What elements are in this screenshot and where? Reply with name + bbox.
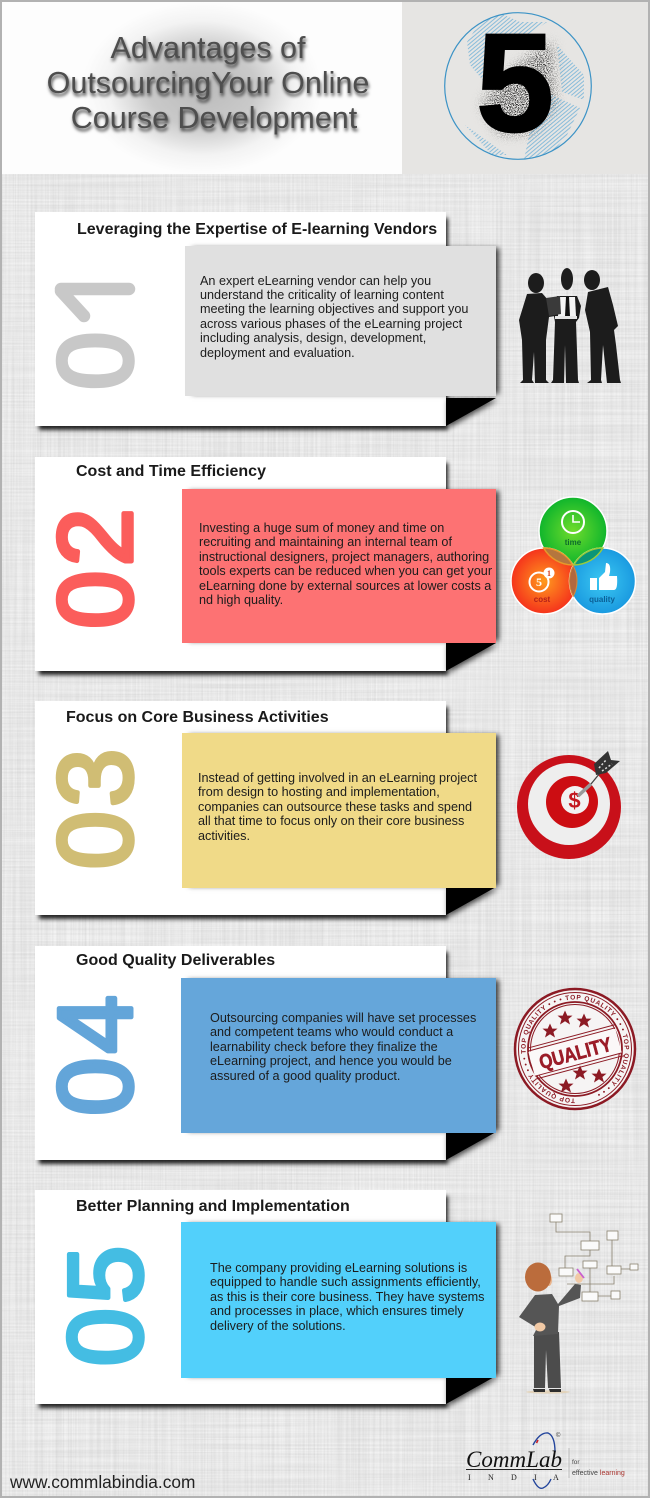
description text: recruiting and maintaining an internal team of bbox=[199, 535, 452, 549]
icon: time cost quality venn bbox=[510, 496, 636, 615]
website url: www.commlabindia.com bbox=[10, 1472, 195, 1492]
title bbox=[46, 31, 372, 140]
heading: Good Quality Deliverables bbox=[76, 952, 275, 969]
description text: tools experts can be reduced when you can get your bbox=[199, 564, 492, 578]
panel: advantage 04 bbox=[35, 946, 636, 1168]
logo: CommLab India: N bbox=[488, 1473, 494, 1482]
logo: CommLab India: © bbox=[556, 1432, 561, 1439]
fold corner bbox=[444, 396, 499, 430]
right grey block with number 5 bbox=[402, 2, 648, 174]
description text: understand the criticality of learning content bbox=[200, 288, 444, 302]
description text: eLearning done by external sources at lower costs a bbox=[199, 579, 491, 593]
heading: Cost and Time Efficiency bbox=[76, 463, 266, 480]
description text: across various phases of the eLearning project bbox=[200, 317, 462, 331]
description text bbox=[210, 1261, 484, 1333]
panel: advantage 01 bbox=[35, 212, 621, 434]
icon: time cost quality venn: cost bbox=[534, 595, 551, 604]
title glow bbox=[82, 2, 322, 174]
description text: Investing a huge sum of money and time on bbox=[199, 521, 444, 535]
icon: time cost quality venn: 1 bbox=[547, 569, 551, 578]
description text bbox=[199, 521, 492, 607]
logo: CommLab India: D bbox=[511, 1473, 517, 1482]
fold corner bbox=[444, 642, 499, 676]
number 01 bbox=[50, 282, 140, 390]
panel: advantage 03 bbox=[35, 701, 621, 922]
description text: as this is their core business. They have systems bbox=[210, 1290, 484, 1304]
description text bbox=[200, 274, 468, 360]
icon: time cost quality venn: 5 bbox=[536, 575, 542, 589]
description text: meeting the learning objectives and support you bbox=[200, 302, 468, 316]
logo: CommLab India: effective learning bbox=[572, 1470, 625, 1477]
description text: instructional designers, project managers, authoring bbox=[199, 550, 489, 564]
logo: CommLab India: CommLab bbox=[466, 1447, 562, 1472]
description panel bbox=[181, 1222, 496, 1378]
description text: learnability check before they finalize the bbox=[210, 1040, 438, 1054]
icon: business people silhouettes bbox=[519, 268, 621, 383]
icon: target with dart bbox=[517, 751, 621, 859]
description panel bbox=[182, 733, 496, 888]
description text: and processes in place, which ensures timely bbox=[210, 1304, 464, 1318]
logo: CommLab India: for bbox=[572, 1459, 580, 1466]
title: OutsourcingYour Online bbox=[47, 66, 369, 100]
description panel bbox=[185, 246, 496, 396]
panel: advantage 05 bbox=[35, 1190, 638, 1412]
description text: equipped to handle such assignments efficiently, bbox=[210, 1275, 481, 1289]
description text: all that time to focus only on their core business bbox=[198, 814, 464, 828]
card background bbox=[35, 212, 446, 426]
card background bbox=[35, 457, 446, 671]
logo: CommLab India bbox=[466, 1432, 625, 1489]
description text: deployment and evaluation. bbox=[200, 346, 355, 360]
fold corner bbox=[444, 886, 499, 920]
description text: activities. bbox=[198, 829, 250, 843]
description text: from design to hosting and implementation, bbox=[198, 785, 440, 799]
icon: time cost quality venn: quality bbox=[589, 595, 615, 604]
description text: Instead of getting involved in an eLearning project bbox=[198, 771, 477, 785]
description text: delivery of the solutions. bbox=[210, 1319, 346, 1333]
fold corner bbox=[444, 1131, 499, 1164]
description panel bbox=[182, 489, 496, 643]
description text: nd high quality. bbox=[199, 593, 283, 607]
heading: Better Planning and Implementation bbox=[76, 1198, 350, 1215]
description text: The company providing eLearning solutions is bbox=[210, 1261, 467, 1275]
title: Advantages of bbox=[110, 31, 306, 65]
logo: CommLab India: I bbox=[534, 1473, 537, 1482]
panel: advantage 02 bbox=[35, 457, 636, 678]
heading: Focus on Core Business Activities bbox=[66, 709, 329, 726]
logo: CommLab India: A bbox=[553, 1473, 559, 1482]
card background bbox=[35, 701, 446, 915]
heading: Leveraging the Expertise of E-learning Vendors bbox=[77, 221, 437, 238]
description text: including analysis, design, development, bbox=[200, 331, 426, 345]
icon: globe with big 5 bbox=[444, 11, 592, 161]
icon: time cost quality venn: time bbox=[565, 538, 582, 547]
title: Course Development bbox=[71, 101, 357, 135]
description text: An expert eLearning vendor can help you bbox=[200, 274, 431, 288]
description text bbox=[198, 771, 477, 843]
description text: Outsourcing companies will have set processes bbox=[210, 1011, 476, 1025]
description text: and competent teams who would conduct a bbox=[210, 1025, 453, 1039]
header banner bbox=[2, 2, 648, 174]
icon: quality stamp: QUALITY bbox=[537, 1034, 615, 1074]
description panel bbox=[181, 978, 496, 1133]
description text: eLearning project, and hence you would be bbox=[210, 1054, 452, 1068]
icon: quality stamp: TOP QUALITY • • • TOP QUALITY • • • TOP QUALITY • • • TOP QUALITY • • • bbox=[521, 994, 630, 1104]
description text: companies can outsource these tasks and spend bbox=[198, 800, 472, 814]
description text: assured of a good quality product. bbox=[210, 1069, 400, 1083]
card background bbox=[35, 1190, 446, 1404]
card background bbox=[35, 946, 446, 1160]
description text bbox=[210, 1011, 476, 1083]
fold corner bbox=[444, 1376, 499, 1408]
logo: CommLab India: I bbox=[468, 1473, 471, 1482]
icon: businessman drawing flowchart bbox=[519, 1214, 638, 1394]
icon: target with dart: $ bbox=[568, 788, 581, 813]
